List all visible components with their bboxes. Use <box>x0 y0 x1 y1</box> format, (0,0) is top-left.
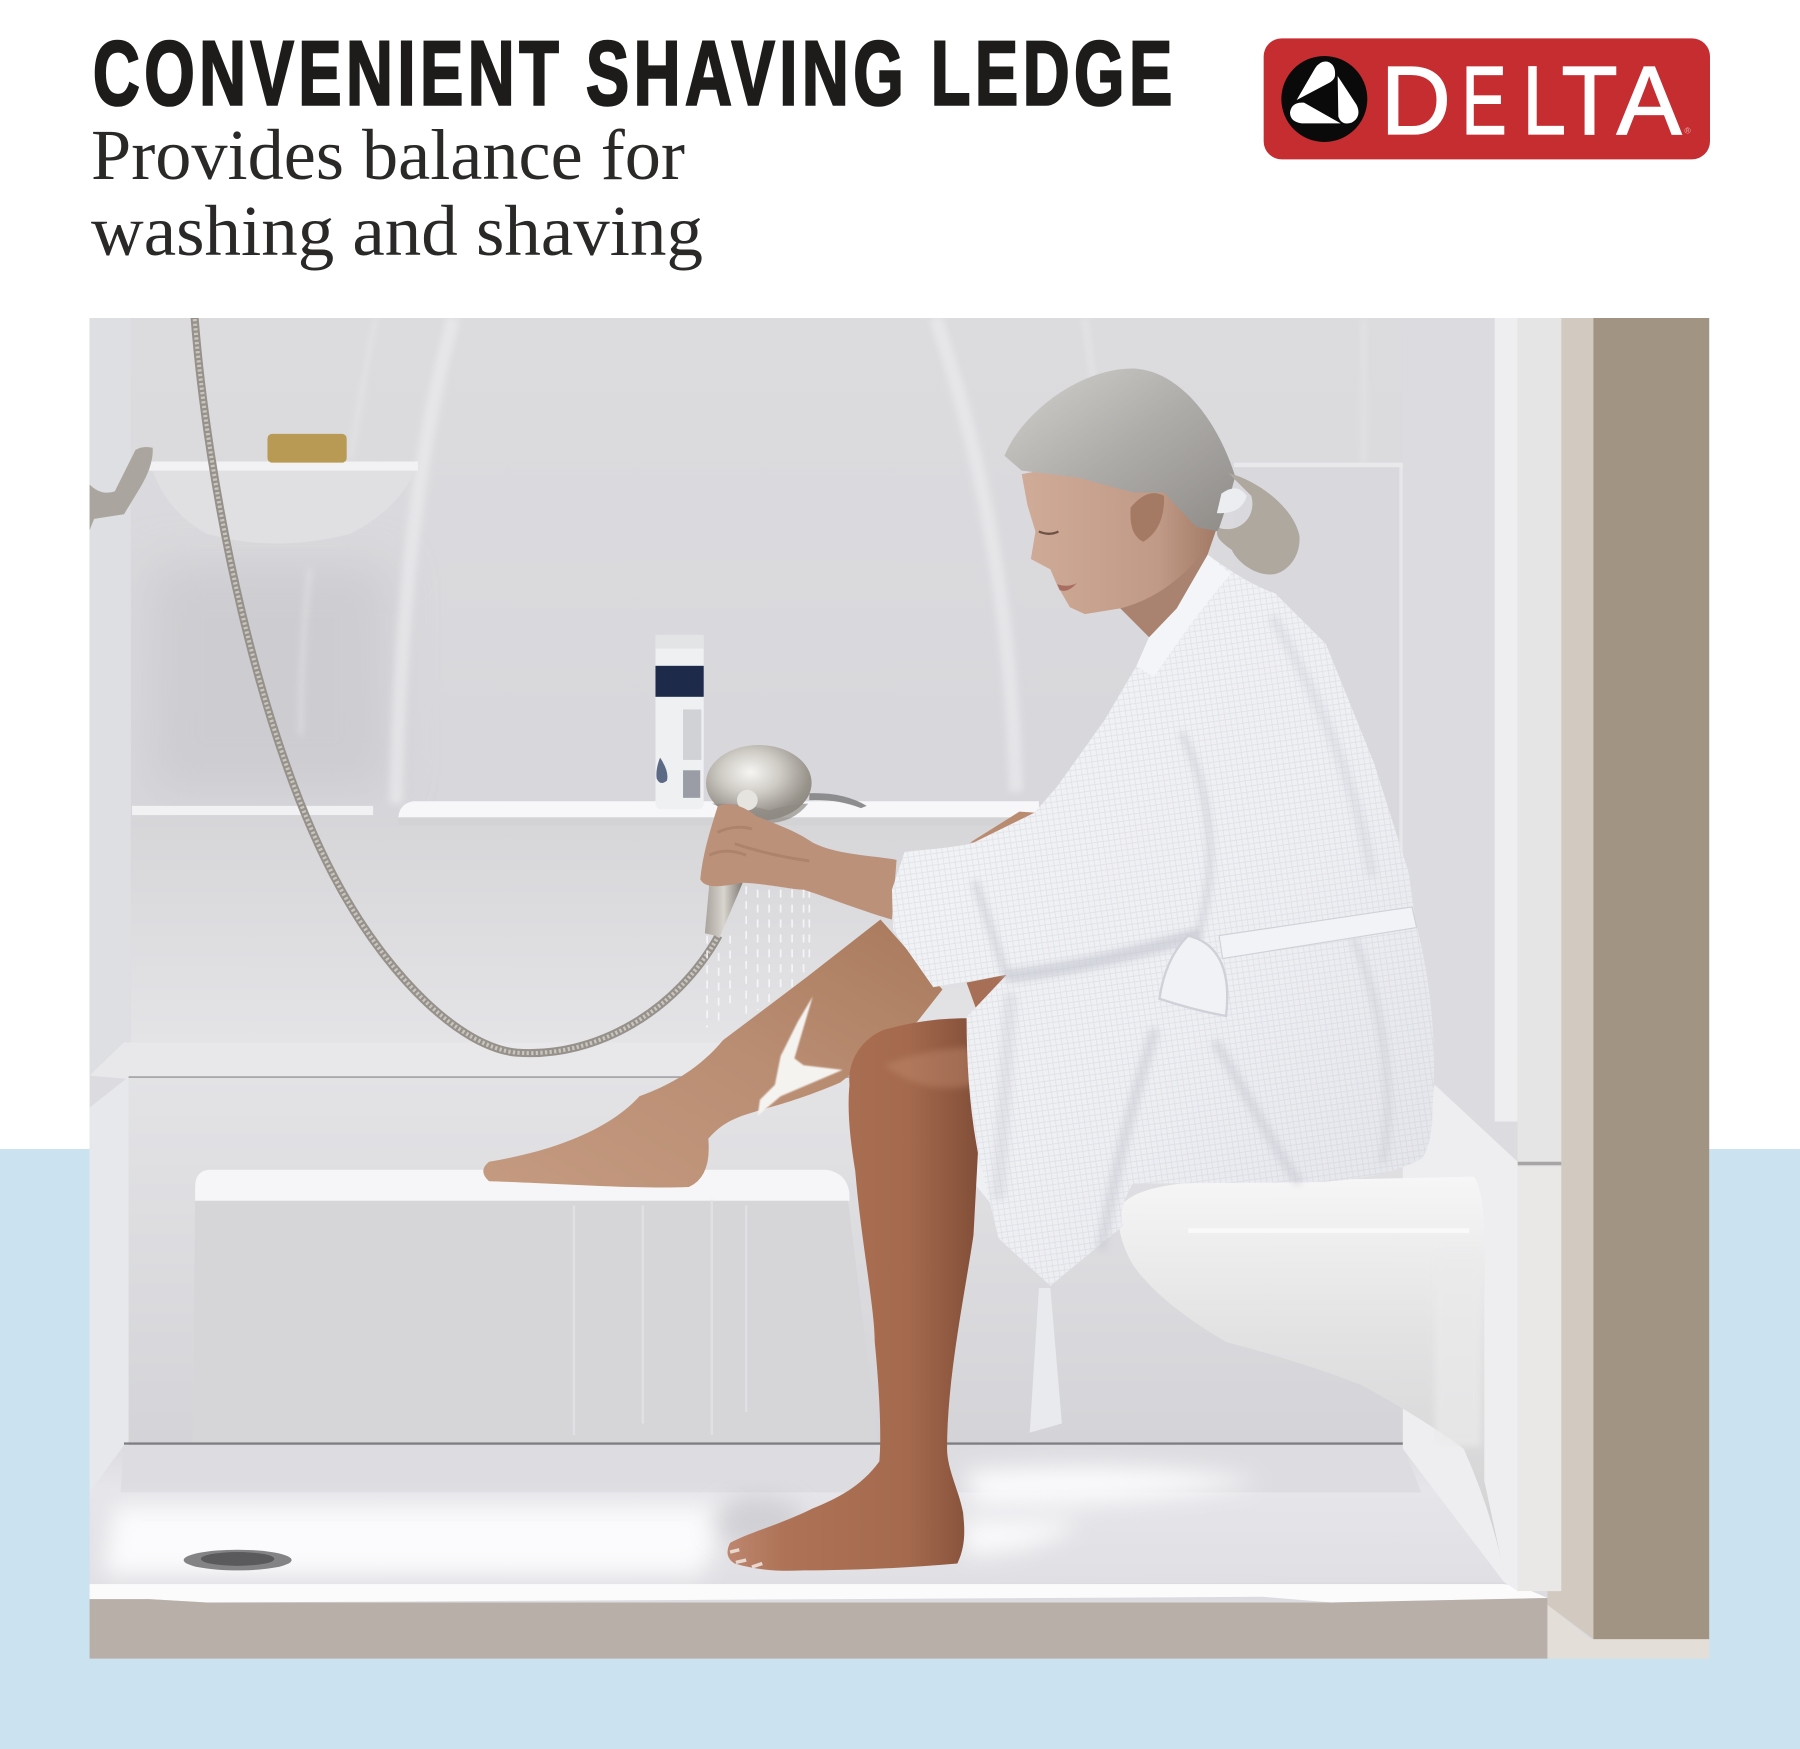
pan front apron <box>90 1598 1547 1659</box>
photo: woman seated in white shower <box>90 310 1709 1659</box>
hanging belt tail <box>1030 1288 1062 1433</box>
logo wordmark: D <box>1381 46 1451 155</box>
left wall shading <box>158 570 382 778</box>
lips <box>1057 583 1077 591</box>
subtitle: Provides balance for <box>91 115 685 195</box>
toenails <box>730 1550 762 1567</box>
neck shadow <box>1120 554 1208 637</box>
robe collar <box>1136 554 1231 677</box>
wall curved reflections <box>390 320 1022 803</box>
shower floor <box>90 1446 1455 1542</box>
logo: Delta <box>1264 38 1710 159</box>
other hand <box>970 812 1037 843</box>
shower handle <box>705 883 743 937</box>
razor on ledge <box>809 793 867 808</box>
foot shadow on floor <box>712 1496 804 1546</box>
ponytail <box>1217 473 1300 574</box>
logo icon: black circle with three white petals <box>1281 56 1367 142</box>
thigh patch under sleeve <box>967 975 1007 1008</box>
pan front lip <box>90 1584 1547 1603</box>
side ledge highlight <box>132 806 373 815</box>
upper-right wall panel <box>1403 318 1495 1110</box>
gray hair <box>1004 368 1300 574</box>
photo base <box>90 318 1709 1659</box>
registered mark: ® <box>1684 125 1691 135</box>
shower back wall <box>90 318 1519 1053</box>
shaving ledge <box>398 801 1039 817</box>
taupe wall <box>1593 318 1709 1639</box>
ear <box>1130 493 1164 542</box>
hand knuckle shading <box>709 827 809 861</box>
wall-mounted seat <box>1118 1177 1505 1577</box>
left side wall <box>90 576 130 1052</box>
logo wordmark: L <box>1522 46 1566 155</box>
water spray <box>707 886 809 1027</box>
robe belt <box>1219 907 1417 959</box>
subtitle: washing and shaving <box>91 191 703 271</box>
logo wordmark: T <box>1561 46 1618 155</box>
bench step <box>128 1076 850 1435</box>
floor drain <box>184 1550 292 1570</box>
subtitle <box>91 115 703 271</box>
beige door jamb <box>1547 318 1593 1639</box>
woman's extended leg <box>483 920 1007 1187</box>
seam between bench and floor <box>124 1442 1404 1445</box>
belt knot <box>1159 936 1227 1016</box>
gap in ponytail <box>1217 488 1247 513</box>
shaving cream can <box>655 635 704 809</box>
soap corner shelf <box>149 434 418 544</box>
lower bench front panel <box>129 1077 1409 1446</box>
bathrobe <box>892 554 1434 1433</box>
shaving foam on leg <box>758 996 843 1116</box>
robe back panel behind leg <box>947 1128 1010 1217</box>
bar of soap <box>267 434 347 463</box>
floor light patches <box>103 1467 1263 1575</box>
robe shadow folds <box>976 620 1388 1246</box>
pale blue background band <box>0 1149 1800 1749</box>
logo wordmark: E <box>1461 46 1507 155</box>
shower hose <box>194 310 719 1053</box>
hand shower head <box>705 745 812 937</box>
closed eye <box>1039 532 1058 534</box>
floor back lip <box>121 1484 1420 1492</box>
lower left side wall <box>90 1077 129 1492</box>
woman's supporting leg <box>728 1018 985 1571</box>
logo badge <box>1264 38 1710 159</box>
ledge band above bench <box>90 1042 720 1078</box>
title: CONVENIENT SHAVING LEDGE <box>93 23 1172 124</box>
forearm and hand holding shower <box>700 804 1037 920</box>
faucet lever handle <box>90 447 153 530</box>
logo wordmark: A <box>1617 46 1682 155</box>
lower wall below ledge <box>131 940 992 1042</box>
woman's head and neck <box>1022 459 1217 637</box>
baseboard <box>1547 1605 1709 1659</box>
right-hand white post <box>1403 318 1561 1591</box>
